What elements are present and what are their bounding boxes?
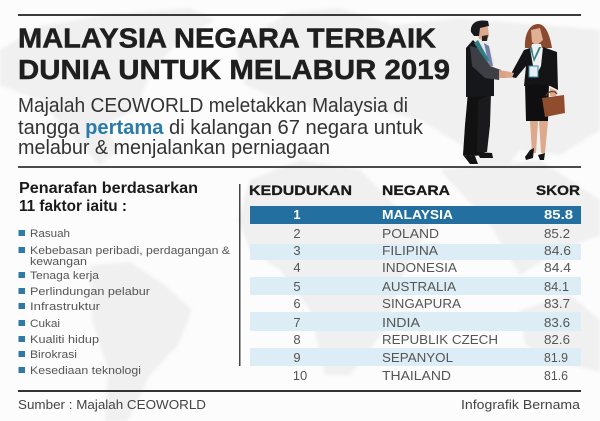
rank numbers: 4: [293, 260, 301, 275]
highlighted row: Malaysia: [250, 206, 581, 224]
bottom rule: [18, 390, 581, 392]
scores: 83.7: [544, 296, 570, 311]
ranking table: [249, 182, 581, 383]
country names: POLAND: [382, 226, 439, 241]
scores: 85.2: [544, 226, 570, 241]
subtitle: [18, 95, 424, 159]
title: [18, 22, 450, 85]
factor list: Rasuah: [30, 228, 70, 240]
rank numbers: 2: [293, 226, 301, 241]
scores: 84.1: [544, 279, 569, 294]
rank numbers: 9: [293, 350, 301, 365]
subtitle: tangga pertama di kalangan 67 negara untuk: [18, 117, 424, 139]
rank numbers: [293, 226, 307, 383]
scores: 81.9: [544, 350, 568, 365]
highlighted row: Malaysia: MALAYSIA: [382, 207, 454, 222]
factor list: Kebebasan peribadi, perdagangan &: [30, 245, 231, 257]
factor list: Tenaga kerja: [30, 270, 100, 282]
scores: 84.4: [544, 260, 571, 275]
rank numbers: 10: [293, 368, 307, 383]
country names: [382, 226, 498, 383]
scores: 82.6: [544, 332, 570, 347]
country names: REPUBLIK CZECH: [382, 332, 498, 347]
scores: 84.6: [544, 243, 571, 258]
title: MALAYSIA NEGARA TERBAIK: [18, 22, 436, 54]
rank numbers: 6: [293, 296, 301, 311]
source note: Sumber : Majalah CEOWORLD: [18, 398, 206, 412]
factor list: [30, 228, 231, 377]
factor list: Birokrasi: [30, 349, 77, 361]
factors heading: 11 faktor iaitu :: [19, 198, 127, 215]
top rule: [18, 14, 581, 16]
scores: 83.6: [544, 315, 570, 330]
highlighted row: Malaysia: 1: [293, 207, 301, 222]
scores: [544, 226, 571, 383]
rank numbers: 8: [293, 332, 301, 347]
title: DUNIA UNTUK MELABUR 2019: [18, 54, 450, 85]
man: [463, 20, 513, 164]
factor list: Kesediaan teknologi: [30, 365, 141, 377]
illustration: businesspeople shaking hands: [463, 20, 565, 164]
country names: INDIA: [382, 315, 420, 330]
country names: AUSTRALIA: [382, 279, 456, 294]
middle rule: [18, 166, 581, 168]
factor list: Kualiti hidup: [30, 334, 99, 346]
table header: NEGARA: [382, 182, 450, 198]
column divider: [239, 184, 240, 366]
country names: FILIPINA: [382, 243, 438, 258]
subtitle: Majalah CEOWORLD meletakkan Malaysia di: [18, 95, 408, 117]
factor list: Perlindungan pelabur: [30, 286, 150, 298]
alternating row bands: [250, 244, 581, 366]
factor list: Infrastruktur: [30, 301, 100, 313]
woman: [505, 24, 565, 160]
table header: [249, 182, 580, 198]
factors heading: Penarafan berdasarkan: [19, 180, 198, 197]
highlighted row: Malaysia: 85.8: [544, 207, 573, 222]
table header: KEDUDUKAN: [249, 182, 352, 198]
country names: THAILAND: [382, 368, 451, 383]
country names: INDONESIA: [382, 260, 457, 275]
scores: 81.6: [544, 368, 568, 383]
factor bullets: [18, 230, 25, 373]
rank numbers: 7: [293, 315, 301, 330]
country names: SINGAPURA: [382, 296, 461, 311]
factors heading: [19, 180, 198, 215]
factor list: Cukai: [30, 318, 60, 330]
country names: SEPANYOL: [382, 350, 453, 365]
factors panel: [18, 180, 231, 377]
table header: SKOR: [536, 182, 580, 198]
credit: Infografik Bernama: [461, 398, 580, 412]
subtitle: melabur & menjalankan perniagaan: [18, 137, 330, 159]
factor list: kewangan: [30, 256, 87, 268]
rank numbers: 5: [293, 279, 301, 294]
rank numbers: 3: [293, 243, 301, 258]
